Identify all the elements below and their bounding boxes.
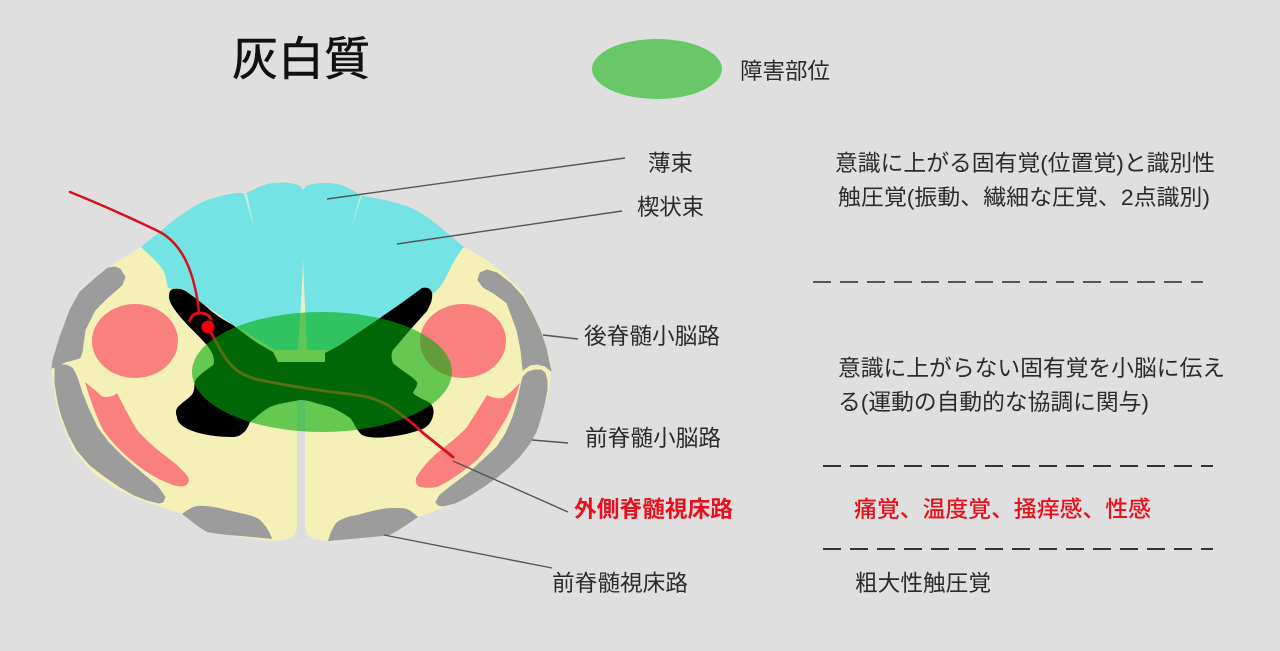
text: spinocerebellar function xyxy=(838,356,1225,415)
text: anterior spinothalamic function: 粗大性触圧覚 xyxy=(855,571,991,596)
legend: lesion site xyxy=(592,39,830,99)
text: dorsal column function xyxy=(835,151,1215,210)
left posterior/cerebellar pink ellipse xyxy=(92,304,178,378)
central fissure lower gap xyxy=(298,428,305,538)
spinal cord cross-section diagram xyxy=(52,183,551,541)
label: anterior spinothalamic tract: 前脊髄視床路 xyxy=(552,571,688,596)
white matter base right xyxy=(305,247,551,541)
right posterior spinocerebellar tract xyxy=(478,270,551,371)
right lateral spinothalamic tract xyxy=(416,383,520,488)
text: dorsal column function: 触圧覚(振動、繊細な圧覚、2点識別) xyxy=(838,185,1210,210)
central cream patch xyxy=(272,350,335,362)
right pink ellipse xyxy=(420,304,506,378)
white matter base left xyxy=(52,247,297,541)
central fissure and septa xyxy=(298,258,307,350)
title: 灰白質 xyxy=(232,33,370,85)
text: spinocerebellar function: る(運動の自動的な協調に関与) xyxy=(838,390,1149,415)
pain pathway: red nerve fiber xyxy=(70,192,453,457)
dorsal columns: fasciculus gracilis and cuneatus xyxy=(141,183,464,350)
right anterior spinocerebellar tract xyxy=(436,370,547,506)
left posterior spinocerebellar tract xyxy=(52,267,125,368)
legend: lesion site: 障害部位 xyxy=(740,59,830,84)
label: posterior spinocerebellar tract: 後脊髄小脳路 xyxy=(584,324,720,349)
right anterior spinothalamic tract xyxy=(328,508,418,541)
text: lateral spinothalamic function: 痛覚、温度覚、掻痒感、性感 xyxy=(854,496,1151,522)
leader lines xyxy=(327,158,625,568)
text: dorsal column function: 意識に上がる固有覚(位置覚)と識別性 xyxy=(835,151,1215,176)
left anterior spinothalamic tract xyxy=(182,506,272,539)
label: gracile fasciculus: 薄束 xyxy=(648,151,693,176)
left lateral spinothalamic tract xyxy=(85,382,189,486)
red synapse dot xyxy=(202,320,214,334)
label: anterior spinocerebellar tract: 前脊髄小脳路 xyxy=(585,426,721,451)
label: cuneate fasciculus: 楔状束 xyxy=(637,195,704,220)
label: lateral spinothalamic tract: 外側脊髄視床路 xyxy=(574,497,733,522)
lesion green ellipse overlay xyxy=(192,312,452,432)
text: spinocerebellar function: 意識に上がらない固有覚を小脳に伝え xyxy=(838,356,1225,381)
left anterior spinocerebellar tract xyxy=(55,365,165,503)
gray matter butterfly xyxy=(169,288,434,438)
